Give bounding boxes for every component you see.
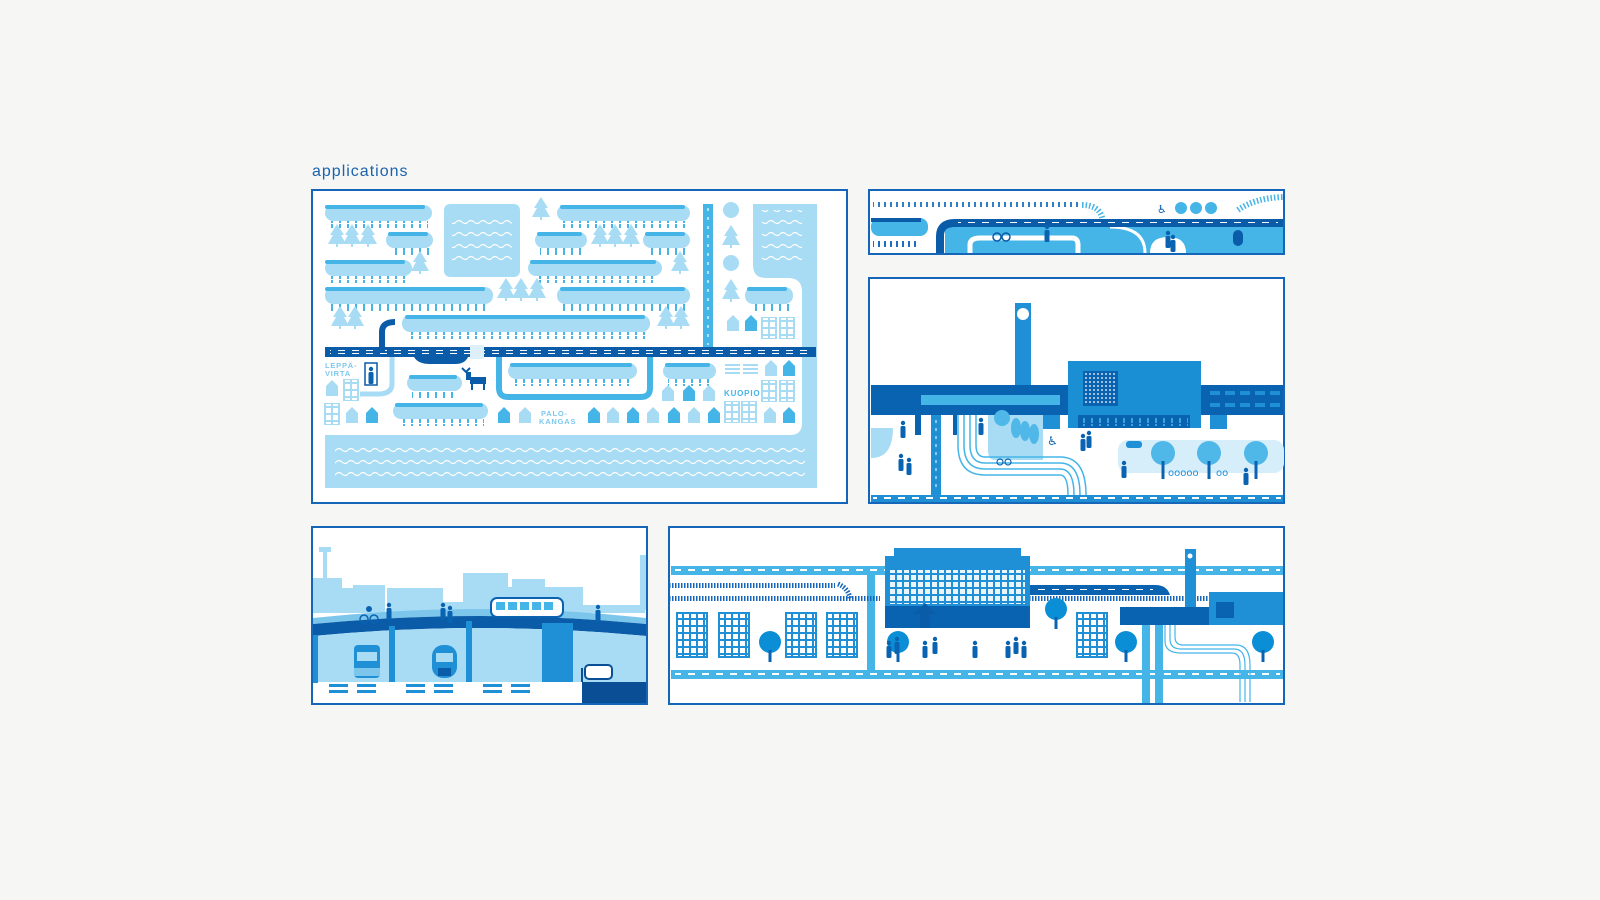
rail line <box>873 202 1083 208</box>
trees <box>759 598 1274 662</box>
trees & people <box>898 418 1268 485</box>
icon: bus stop <box>365 363 377 385</box>
people <box>886 637 1026 658</box>
building band <box>871 385 1283 415</box>
main building <box>885 548 1030 628</box>
houses <box>324 315 795 425</box>
label: LEPPÄVIRTA: LEPPÄ- <box>325 361 357 370</box>
main road <box>940 223 1283 253</box>
trees <box>328 197 740 329</box>
trains <box>354 645 457 678</box>
lake: bottom <box>325 435 817 488</box>
people & icons: ♿ <box>1157 203 1167 216</box>
roads <box>671 566 1283 703</box>
chimney & factory <box>1120 549 1283 625</box>
trees & people: oo <box>1216 468 1228 479</box>
rails <box>670 583 1245 601</box>
lake: top <box>444 204 520 277</box>
people on bridge <box>360 603 600 623</box>
label: LEPPÄVIRTA: VIRTA <box>325 369 351 378</box>
panel: road strip <box>869 190 1284 254</box>
panel: station square <box>869 278 1284 503</box>
train <box>1030 585 1170 595</box>
bottom lanes <box>329 684 530 693</box>
people & icons <box>993 202 1277 252</box>
lake: right shore <box>325 204 817 437</box>
label: PALOKANGAS: PALO- <box>541 409 568 418</box>
forests <box>325 205 793 426</box>
bridge deck <box>313 609 646 624</box>
office blocks <box>676 612 1108 658</box>
skyline <box>313 547 646 614</box>
trees & people: ooooo <box>1168 468 1199 479</box>
trees & people: ♿ <box>1047 434 1058 448</box>
bus <box>491 598 563 617</box>
icon: moose <box>462 368 486 390</box>
road: vertical <box>703 204 713 349</box>
road: loop <box>499 357 650 397</box>
landscape band <box>945 227 1283 253</box>
pillars <box>915 415 957 435</box>
road & tracks <box>871 415 1283 502</box>
highway <box>325 322 816 394</box>
panel: city street <box>669 527 1284 704</box>
tracks curve <box>1165 625 1250 702</box>
lower deck <box>313 628 646 682</box>
clock tower <box>1015 303 1031 388</box>
label: PALOKANGAS: KANGAS <box>539 417 576 426</box>
label: KUOPIO: KUOPIO <box>724 389 760 398</box>
panel: regional map <box>312 190 847 503</box>
panel: bridge <box>312 527 647 704</box>
green areas <box>871 428 893 458</box>
title: applications <box>312 163 408 180</box>
train stub <box>871 218 928 236</box>
station building <box>1068 361 1201 428</box>
